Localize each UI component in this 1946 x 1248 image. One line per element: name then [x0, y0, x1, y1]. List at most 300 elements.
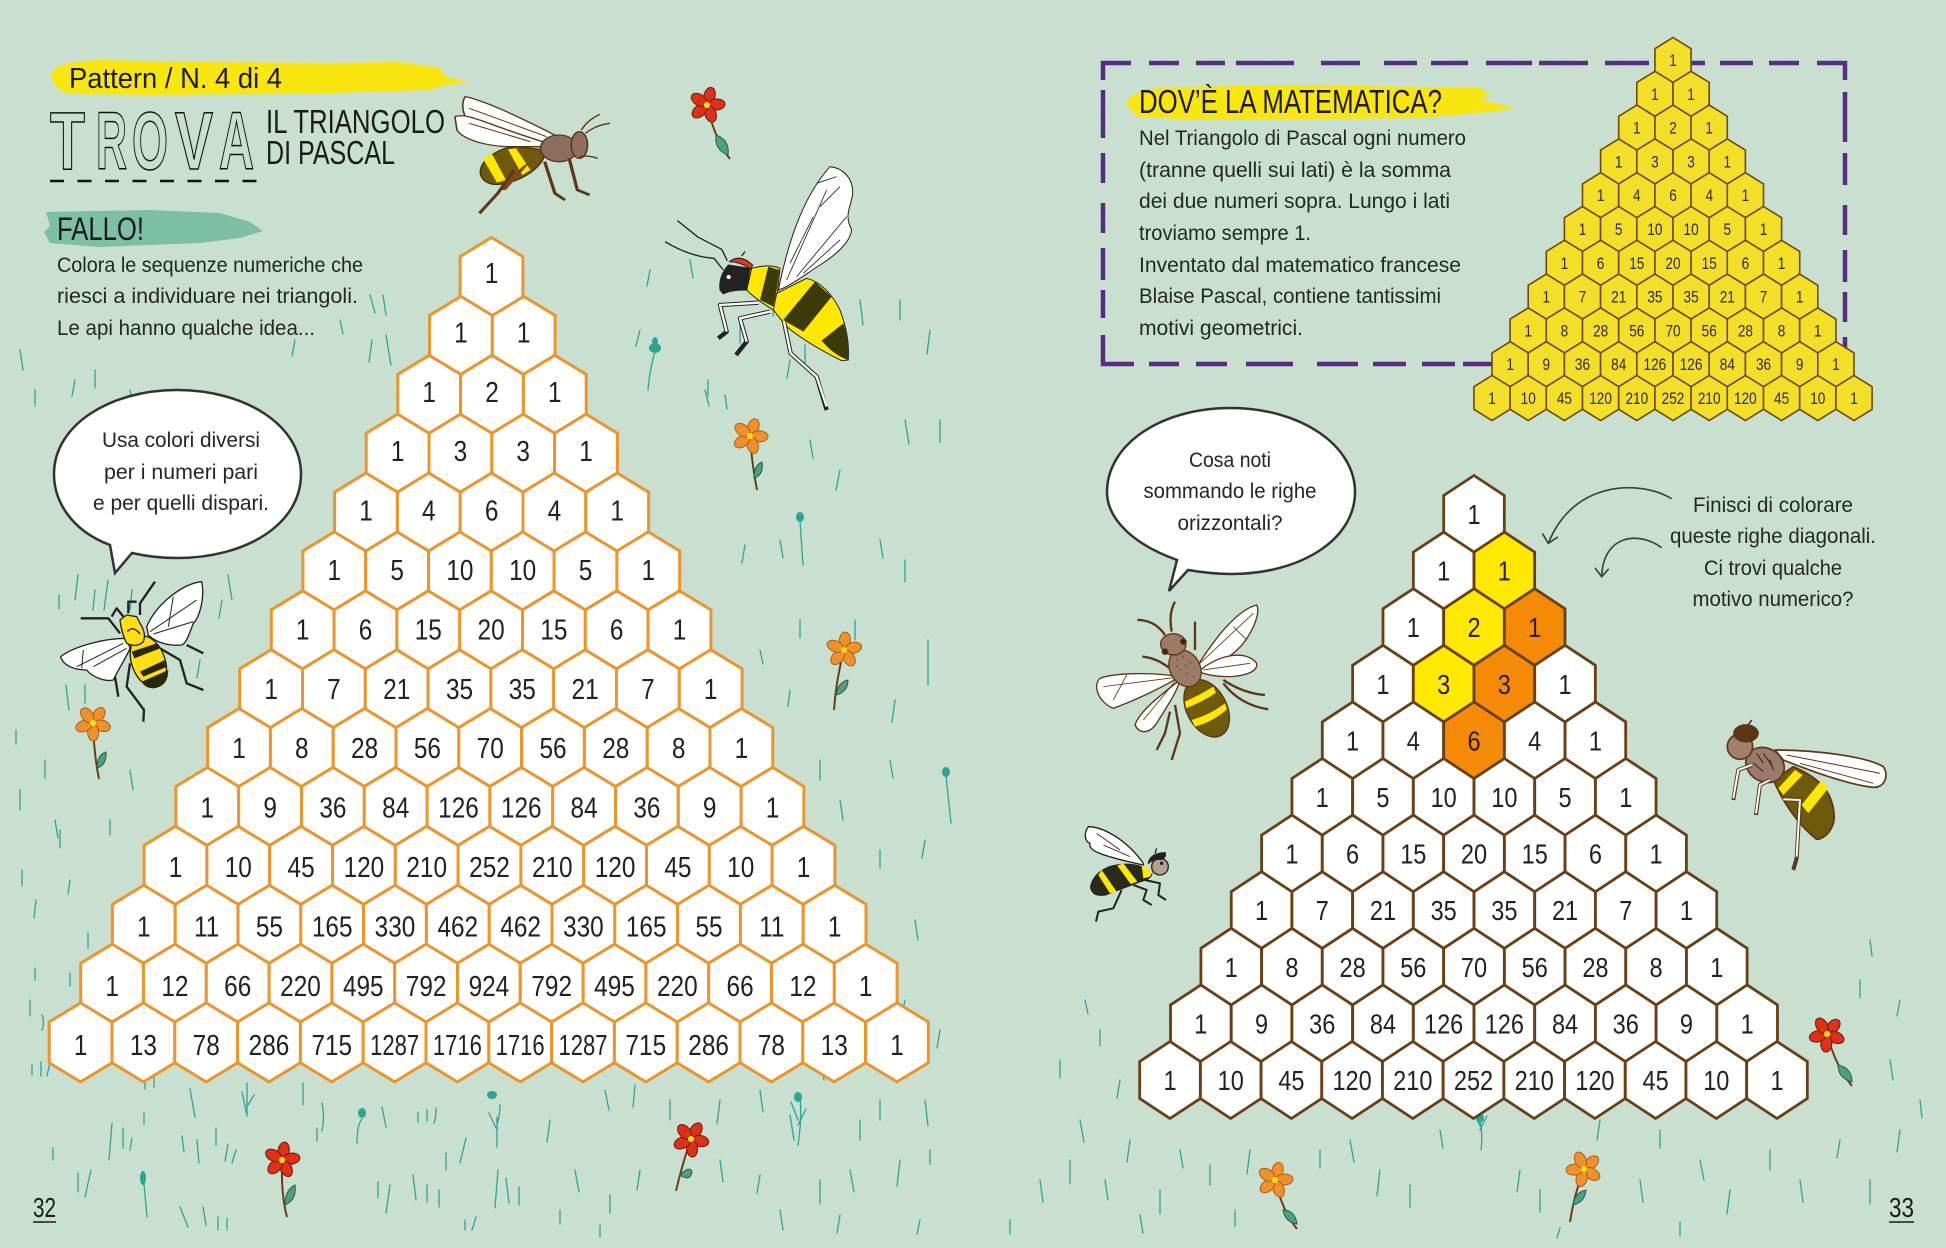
- row 4: 1: [1724, 153, 1731, 172]
- speech bubble left: [54, 390, 301, 573]
- arrow 1: [1543, 488, 1671, 543]
- instructions text: Colora le sequenze numeriche che: [57, 254, 363, 277]
- row 10: [1171, 985, 1777, 1062]
- row 7: 1: [673, 613, 686, 646]
- row 3: 2: [1669, 119, 1677, 138]
- row 11: [1140, 1042, 1807, 1118]
- row 4: 1: [1376, 670, 1389, 700]
- row 4: 1: [1615, 153, 1622, 172]
- row 9: 28: [1340, 953, 1366, 983]
- row 8: [1528, 274, 1818, 319]
- orange flower 1: [726, 413, 774, 490]
- row 5: 1: [1597, 187, 1604, 206]
- row 5: 4: [548, 495, 561, 527]
- row 9: [1510, 308, 1836, 353]
- bee: brown with acorn cap: [1727, 720, 1886, 870]
- title TROVA: O: [132, 96, 168, 187]
- row 7: [1546, 240, 1800, 285]
- row 13: 66: [727, 970, 754, 1002]
- row 5: 1: [359, 495, 373, 527]
- row 8: 21: [1370, 896, 1396, 927]
- row 12: 55: [695, 910, 723, 943]
- row 6: 5: [390, 554, 404, 586]
- row 10: 9: [1255, 1010, 1268, 1040]
- row 3: 1: [548, 376, 562, 408]
- red flower top: [684, 83, 730, 159]
- row 9: 8: [1285, 953, 1298, 983]
- row 9: 56: [1702, 322, 1717, 341]
- instructions text: riesci a individuare nei triangoli.: [57, 285, 358, 308]
- row 14: [49, 1003, 928, 1082]
- row 10: 84: [382, 792, 409, 824]
- row 13: 220: [280, 970, 321, 1002]
- row 12: 1: [137, 910, 151, 943]
- row 6: 1: [1579, 221, 1586, 239]
- row 10: 36: [1613, 1010, 1639, 1040]
- row 11: 252: [469, 851, 510, 883]
- row 7: 20: [478, 613, 505, 646]
- row 9: 70: [1461, 953, 1487, 983]
- row 9: 56: [414, 732, 441, 765]
- speech bubble right: [1107, 408, 1355, 591]
- row 13: 1: [859, 970, 872, 1002]
- row 9: 28: [602, 732, 629, 765]
- row 4: 1: [391, 435, 404, 468]
- row 7: 1: [296, 613, 309, 646]
- row 11: 45: [1774, 390, 1789, 408]
- row 6: 10: [1684, 221, 1699, 239]
- row 12: 165: [312, 910, 353, 943]
- row 1: 1: [1467, 500, 1481, 530]
- row 9: 56: [539, 732, 567, 765]
- explanation text: Nel Triangolo di Pascal ogni numero: [1139, 127, 1466, 150]
- row 9: 8: [1778, 322, 1785, 341]
- row 10: 84: [571, 792, 598, 824]
- row 8: 21: [1611, 288, 1626, 307]
- row 3: [398, 355, 586, 434]
- row 11: 10: [1810, 390, 1825, 408]
- row 9: [1201, 928, 1747, 1005]
- arrow 2: [1595, 538, 1661, 577]
- row 6: 10: [509, 554, 536, 586]
- row 11: 120: [595, 851, 635, 883]
- row 12: 330: [375, 910, 415, 943]
- row 8: 7: [1579, 288, 1586, 307]
- row 11: [144, 826, 835, 905]
- yellow brush behind math heading: [1128, 85, 1516, 120]
- row 6: 10: [1431, 783, 1457, 813]
- row 4: 1: [579, 435, 593, 468]
- row 9: 1: [1710, 953, 1723, 983]
- small yellow Pascal triangle: [1474, 38, 1872, 420]
- row 10: [176, 767, 804, 846]
- row 7: 1: [1561, 254, 1568, 273]
- row 2: 1: [1498, 557, 1511, 587]
- row 5: 1: [610, 495, 624, 527]
- row 8: 21: [572, 673, 599, 705]
- row 5: 6: [1467, 727, 1481, 757]
- row 8: 35: [509, 673, 536, 705]
- instruction: finish colouring: [1670, 494, 1876, 611]
- large Pascal triangle with orange outlines: [49, 238, 928, 1082]
- bee: brown with spread wings: [1097, 602, 1268, 760]
- row 3: 1: [1407, 613, 1420, 644]
- row 9: 1: [1814, 322, 1822, 341]
- row 11: 210: [1625, 390, 1648, 408]
- row 11: 45: [288, 851, 315, 883]
- row 9: 1: [232, 732, 246, 765]
- row 14: 13: [130, 1029, 157, 1062]
- row 7: 15: [1629, 254, 1644, 273]
- row 9: 28: [351, 732, 378, 765]
- row 9: 70: [477, 732, 504, 765]
- row 2: 1: [1687, 85, 1695, 104]
- row 11: 1: [169, 851, 182, 883]
- row 10: 36: [1575, 356, 1590, 375]
- row 13: 924: [469, 970, 509, 1002]
- row 13: 12: [161, 970, 188, 1002]
- row 9: 28: [1738, 322, 1753, 341]
- row 13: 495: [343, 970, 384, 1002]
- bee: small black: [1085, 827, 1168, 922]
- row 7: 20: [1665, 254, 1681, 273]
- row 11: 210: [1698, 390, 1721, 408]
- row 11: 1: [1770, 1066, 1784, 1096]
- row 10: 126: [501, 792, 542, 824]
- row 7: 15: [1522, 840, 1548, 870]
- teal wild flowers: [140, 337, 1484, 1185]
- row 7: 1: [1285, 840, 1298, 870]
- row 8: 7: [1316, 896, 1329, 927]
- row 10: 126: [1644, 356, 1666, 375]
- row 14: 1287: [558, 1030, 608, 1062]
- row 12: 1: [828, 910, 841, 943]
- row 8: 1: [1543, 288, 1550, 307]
- row 11: 252: [1454, 1066, 1493, 1096]
- row 10: 126: [1424, 1010, 1463, 1040]
- row 8: 35: [1491, 896, 1517, 927]
- row 11: 210: [1393, 1066, 1432, 1096]
- row 6: 5: [1376, 783, 1389, 813]
- row 10: [1492, 342, 1854, 387]
- speech bubble left: e per quelli dispari.: [93, 492, 269, 515]
- row 10: 126: [438, 792, 479, 824]
- row 12: 165: [626, 910, 667, 943]
- row 11: 10: [1521, 390, 1536, 408]
- row 14: 1716: [496, 1030, 545, 1062]
- row 13: [81, 944, 897, 1023]
- explanation text: motivi geometrici.: [1139, 317, 1303, 340]
- row 11: 120: [1332, 1066, 1372, 1096]
- row 10: 36: [1756, 356, 1771, 375]
- row 3: 1: [1633, 119, 1641, 138]
- green brush behind FALLO: [44, 210, 263, 247]
- row 8: 35: [1431, 896, 1457, 927]
- row 9: 56: [1629, 322, 1644, 341]
- row 4: [1353, 645, 1595, 722]
- row 8: 1: [264, 673, 278, 705]
- row 14: 13: [821, 1029, 848, 1062]
- title TROVA: T: [50, 96, 85, 187]
- row 8: 21: [1552, 896, 1578, 927]
- row 10: 1: [201, 792, 214, 824]
- explanation text: troviamo sempre 1.: [1139, 222, 1311, 245]
- row 2: 1: [1437, 557, 1450, 587]
- row 7: [271, 591, 711, 670]
- row 14: 1: [74, 1029, 87, 1062]
- row 1: [1444, 476, 1504, 552]
- row 7: 1: [1650, 840, 1663, 870]
- explanation text: (tranne quelli sui lati) è la somma: [1139, 159, 1451, 182]
- row 10: 84: [1370, 1010, 1396, 1040]
- row 12: 11: [759, 910, 784, 943]
- row 7: 6: [359, 613, 372, 646]
- row 13: 220: [657, 970, 698, 1002]
- row 6: 5: [579, 554, 592, 586]
- chapter label: Pattern / N. 4 di 4: [69, 63, 282, 95]
- row 5: [1582, 173, 1764, 218]
- row 7: 15: [540, 613, 567, 646]
- row 12: 330: [563, 910, 604, 943]
- row 12: 55: [256, 910, 283, 943]
- red flower bottom left: [260, 1139, 304, 1217]
- row 9: 8: [1561, 322, 1568, 341]
- row 5: 1: [1346, 727, 1359, 757]
- row 1: 1: [485, 257, 498, 289]
- row 9: 1: [1524, 322, 1532, 341]
- subtitle: IL TRIANGOLO: [266, 103, 445, 140]
- instruction: finish colouring: Ci trovi qualche: [1704, 557, 1842, 580]
- row 9: 56: [1400, 953, 1426, 983]
- row 4: 1: [1559, 670, 1572, 700]
- right Pascal triangle with coloured diagonals: [1140, 476, 1807, 1118]
- row 10: 1: [1194, 1010, 1207, 1040]
- instructions text: Le api hanno qualche idea...: [57, 317, 315, 340]
- row 9: 28: [1582, 953, 1608, 983]
- row 10: 1: [1741, 1010, 1754, 1040]
- row 7: 1: [1778, 254, 1785, 273]
- row 10: 126: [1680, 356, 1702, 375]
- row 13: 12: [789, 970, 816, 1002]
- row 6: 5: [1724, 221, 1731, 239]
- row 6: [1292, 758, 1656, 836]
- row 3: [1383, 589, 1565, 666]
- row 10: 84: [1552, 1010, 1578, 1040]
- row 9: 8: [295, 732, 309, 765]
- speech bubble right: orizzontali?: [1178, 512, 1282, 535]
- row 13: 66: [224, 970, 251, 1002]
- row 14: 78: [193, 1029, 220, 1062]
- row 11: 1: [797, 851, 810, 883]
- row 4: 3: [516, 435, 530, 468]
- subtitle: [266, 103, 445, 171]
- row 12: [112, 885, 866, 964]
- title TROVA: [50, 96, 254, 187]
- row 6: 1: [1316, 783, 1329, 813]
- row 10: 36: [633, 792, 660, 824]
- row 7: 6: [1597, 254, 1604, 273]
- row 5: 4: [1633, 187, 1641, 206]
- bee: yellow with wings spread: [61, 582, 203, 722]
- instructions text: [57, 254, 363, 340]
- row 10: 9: [1796, 356, 1803, 375]
- speech bubble right: Cosa noti: [1189, 449, 1271, 472]
- row 2: [1637, 71, 1709, 116]
- row 9: 1: [1225, 953, 1238, 983]
- row 2: 1: [1651, 85, 1659, 104]
- row 6: 10: [1647, 221, 1662, 239]
- row 1: 1: [1669, 52, 1677, 70]
- row 11: 10: [1703, 1066, 1729, 1096]
- row 3: 2: [485, 376, 499, 408]
- row 11: 45: [1643, 1066, 1669, 1096]
- row 9: [208, 708, 773, 788]
- row 10: 1: [1506, 356, 1514, 375]
- row 7: 6: [1589, 840, 1602, 870]
- row 9: 56: [1522, 953, 1548, 983]
- row 11: 1: [1163, 1066, 1177, 1096]
- row 10: 1: [1832, 356, 1840, 375]
- row 11: 1: [1488, 390, 1496, 408]
- row 10: 126: [1485, 1010, 1524, 1040]
- row 4: 3: [1687, 153, 1695, 172]
- row 5: 4: [422, 495, 436, 527]
- instruction: finish colouring: Finisci di colorare: [1693, 494, 1853, 517]
- row 4: 3: [1651, 153, 1659, 172]
- row 14: 715: [311, 1029, 352, 1062]
- row 14: 286: [249, 1029, 289, 1062]
- row 7: 20: [1461, 840, 1487, 870]
- row 5: [335, 473, 649, 552]
- row 14: 1716: [433, 1030, 482, 1062]
- row 6: 10: [1491, 783, 1517, 813]
- explanation text: Inventato dal matematico francese: [1139, 254, 1461, 277]
- row 8: 7: [1760, 288, 1767, 307]
- row 8: 21: [1720, 288, 1735, 307]
- instruction: finish colouring: motivo numerico?: [1692, 588, 1854, 611]
- row 8: 1: [1255, 896, 1268, 927]
- row 8: 7: [327, 673, 341, 705]
- row 10: 36: [1309, 1010, 1335, 1040]
- page number 32: 32: [33, 1192, 56, 1223]
- row 7: 6: [1346, 840, 1359, 870]
- row 11: 120: [1589, 390, 1612, 408]
- row 4: [366, 414, 617, 493]
- row 3: 1: [1705, 119, 1713, 138]
- row 13: 495: [594, 970, 635, 1002]
- row 7: 15: [415, 613, 442, 646]
- row 10: 36: [319, 792, 346, 824]
- orange flower 4: [1252, 1158, 1298, 1229]
- row 2: [1413, 532, 1535, 609]
- row 5: 6: [485, 495, 498, 527]
- row 5: 1: [1742, 187, 1749, 206]
- bee: brown top left: [455, 97, 610, 213]
- row 13: 792: [406, 970, 446, 1002]
- row 6: 1: [642, 554, 655, 586]
- row 12: 11: [194, 910, 219, 943]
- row 6: 1: [1760, 221, 1767, 239]
- row 4: 3: [454, 435, 467, 468]
- subtitle: DI PASCAL: [266, 134, 395, 171]
- row 8: 1: [1680, 896, 1693, 927]
- row 7: [1262, 815, 1686, 892]
- row 3: 2: [1467, 613, 1481, 644]
- row 11: 45: [1557, 390, 1572, 408]
- row 3: [1619, 105, 1727, 150]
- speech bubble left: Usa colori diversi: [102, 429, 260, 452]
- row 10: 9: [1543, 356, 1550, 375]
- row 6: 1: [1619, 783, 1632, 813]
- orange flower 2: [824, 630, 864, 710]
- page number 33: 33: [1889, 1192, 1914, 1223]
- row 8: [1231, 872, 1717, 949]
- row 11: 252: [1662, 390, 1684, 408]
- title TROVA: A: [219, 96, 254, 187]
- row 1: [1655, 38, 1691, 82]
- row 1: [460, 238, 523, 316]
- row 14: 286: [688, 1029, 729, 1062]
- title TROVA: V: [175, 96, 213, 187]
- row 2: 1: [454, 316, 468, 349]
- heading FALLO: FALLO!: [57, 211, 144, 247]
- row 4: [1601, 139, 1745, 184]
- row 9: 70: [1665, 322, 1681, 341]
- title underline: [50, 180, 258, 182]
- explanation text: [1139, 127, 1466, 340]
- row 12: 462: [500, 910, 541, 943]
- row 11: 45: [1278, 1066, 1304, 1096]
- row 11: 120: [1734, 390, 1757, 408]
- row 5: 4: [1705, 187, 1713, 206]
- row 13: 792: [531, 970, 572, 1002]
- row 8: 7: [641, 673, 655, 705]
- row 2: [430, 296, 555, 375]
- row 11: 210: [406, 851, 447, 883]
- speech bubble left: per i numeri pari: [104, 461, 258, 484]
- row 6: [1564, 206, 1782, 252]
- explanation text: dei due numeri sopra. Lungo i lati: [1139, 190, 1450, 213]
- row 8: 35: [1684, 288, 1699, 307]
- row 11: 210: [532, 851, 573, 883]
- row 3: 1: [1528, 613, 1541, 644]
- row 8: 35: [1647, 288, 1662, 307]
- bee: black head red cap: [665, 167, 853, 410]
- row 7: 6: [1742, 254, 1749, 273]
- grass: [16, 260, 1922, 1238]
- explanation text: Blaise Pascal, contiene tantissimi: [1139, 285, 1441, 308]
- row 9: 8: [1650, 953, 1663, 983]
- row 6: [303, 532, 680, 611]
- yellow brush behind chapter label: [52, 60, 469, 95]
- row 11: 10: [727, 851, 754, 883]
- row 11: 120: [344, 851, 384, 883]
- row 6: 1: [328, 554, 341, 586]
- red flower right: [1801, 1008, 1853, 1086]
- row 5: [1322, 702, 1626, 779]
- row 11: 10: [225, 851, 252, 883]
- row 14: 715: [625, 1029, 666, 1062]
- row 10: 9: [703, 792, 716, 824]
- row 9: 8: [672, 732, 685, 765]
- instruction: finish colouring: queste righe diagonali.: [1670, 525, 1876, 548]
- row 8: 1: [704, 673, 717, 705]
- row 8: 1: [1796, 288, 1803, 307]
- row 6: 5: [1615, 221, 1622, 239]
- red flower bottom centre: [666, 1114, 716, 1191]
- speech bubble right: sommando le righe: [1144, 480, 1316, 503]
- row 13: 1: [105, 970, 119, 1002]
